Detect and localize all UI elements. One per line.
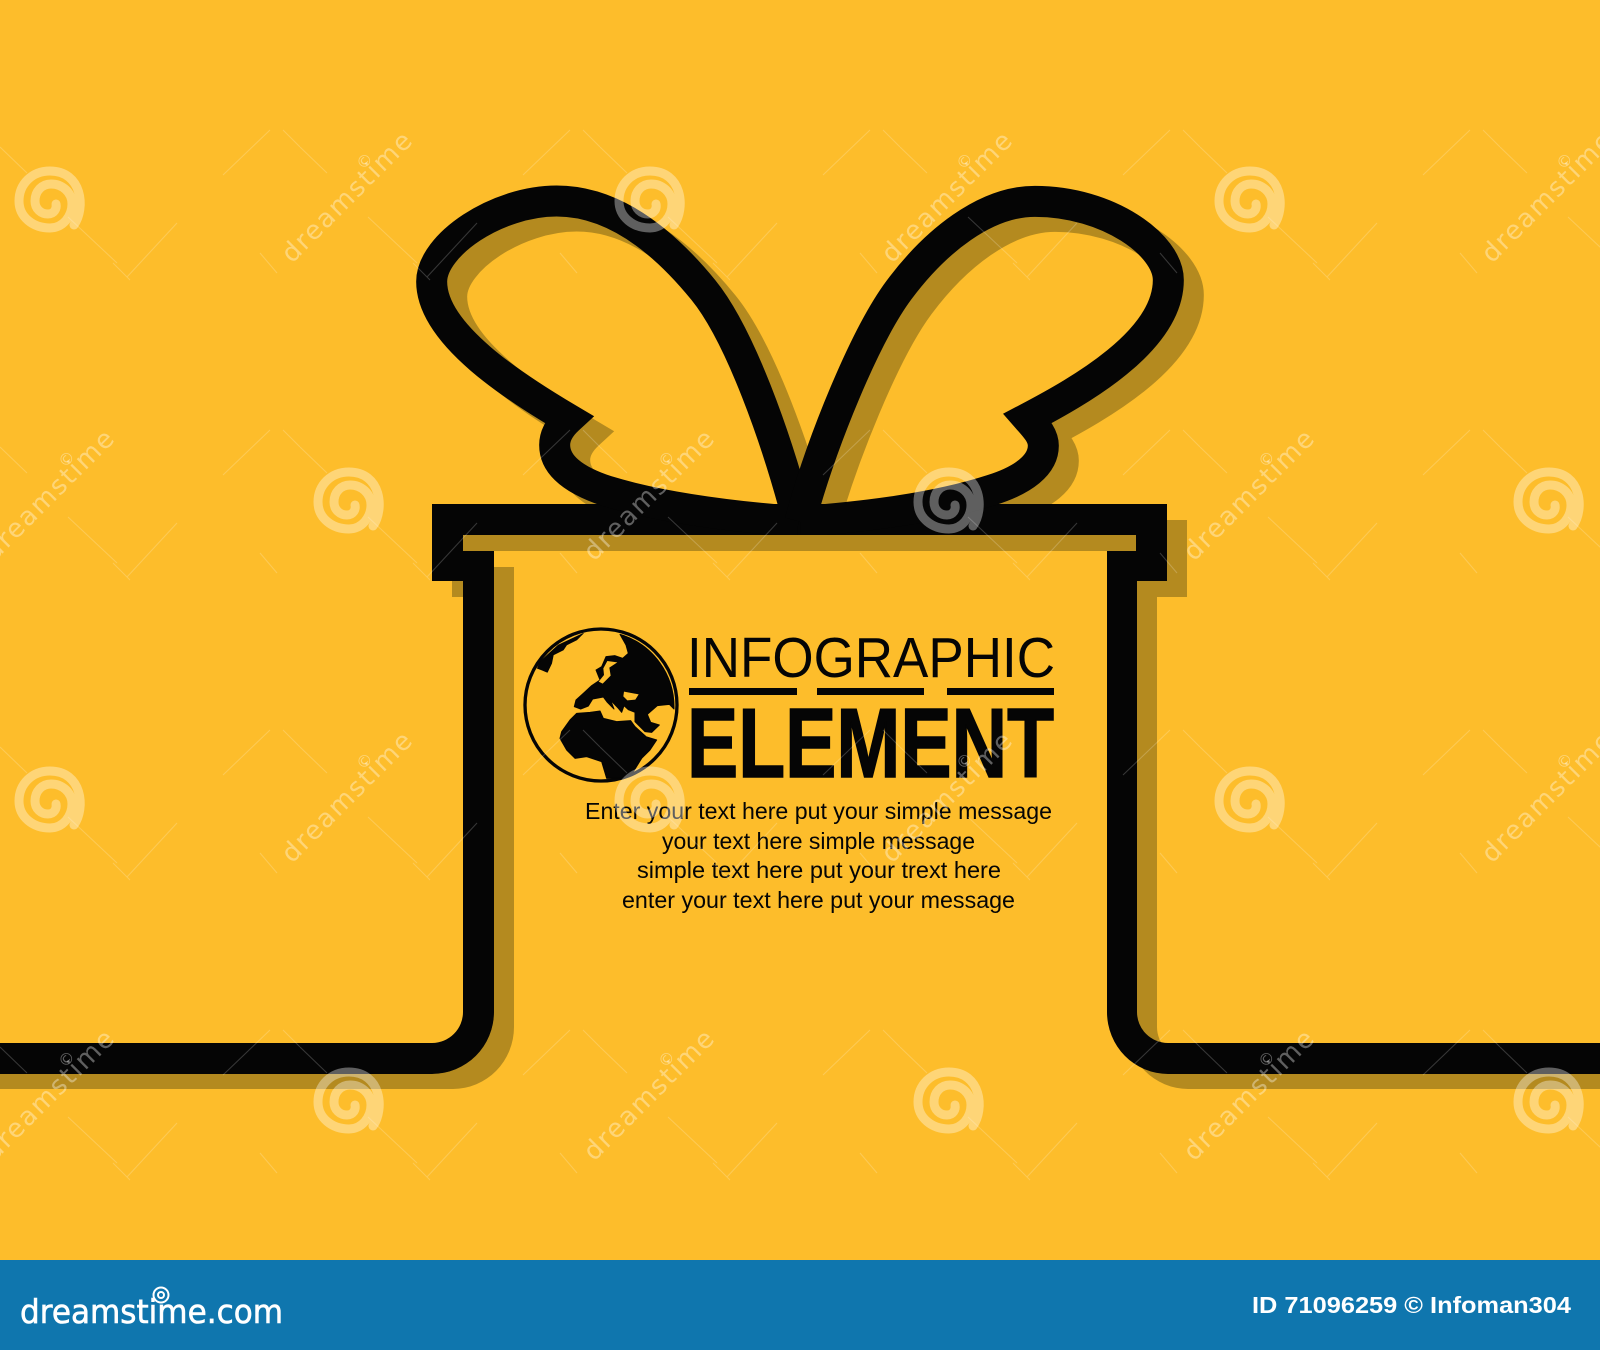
watermark words: dreamstime [578, 424, 721, 567]
watermark words: © [654, 447, 679, 471]
watermark words: © [1254, 1047, 1279, 1071]
watermark words: © [352, 749, 377, 773]
watermark spirals [19, 171, 1579, 1129]
body text: Enter your text here put your simple message [585, 798, 1052, 824]
gift box line with ribbon line [0, 504, 1600, 1074]
watermark words: © [54, 447, 79, 471]
watermark words: dreamstime [876, 726, 1019, 869]
body text: simple text here put your trext here [637, 857, 1001, 883]
footer logo wordmark: dreamstime.com [20, 1292, 283, 1331]
body text [585, 798, 1052, 913]
body text: your text here simple message [662, 828, 975, 854]
footer logo swirl [154, 1288, 168, 1302]
watermark words: © [1552, 149, 1577, 173]
divider bars [689, 688, 1054, 695]
footer bar [0, 1260, 1600, 1350]
footer image id and credit: ID 71096259 © Infoman304 [1252, 1292, 1571, 1318]
watermark words: © [1552, 749, 1577, 773]
watermark words: © [352, 149, 377, 173]
icon: globe [525, 629, 677, 781]
heading: element: ELEMENT [687, 688, 1054, 798]
watermark words: dreamstime [578, 1024, 721, 1167]
watermark words: © [1254, 447, 1279, 471]
watermark words: dreamstime [876, 126, 1019, 269]
watermark words: © [952, 749, 977, 773]
gift bow [432, 201, 1168, 522]
watermark words: © [952, 149, 977, 173]
watermark words: © [54, 1047, 79, 1071]
watermark words: dreamstime [1178, 424, 1321, 567]
watermark words [0, 120, 1600, 1167]
gift outline shadow [0, 216, 1600, 1089]
body text: enter your text here put your message [622, 887, 1015, 913]
watermark words: © [654, 1047, 679, 1071]
watermark words: dreamstime [276, 126, 419, 269]
heading: infographic: INFOGRAPHIC [687, 626, 1055, 690]
watermark words: dreamstime [1178, 1024, 1321, 1167]
watermark words: dreamstime [276, 726, 419, 869]
